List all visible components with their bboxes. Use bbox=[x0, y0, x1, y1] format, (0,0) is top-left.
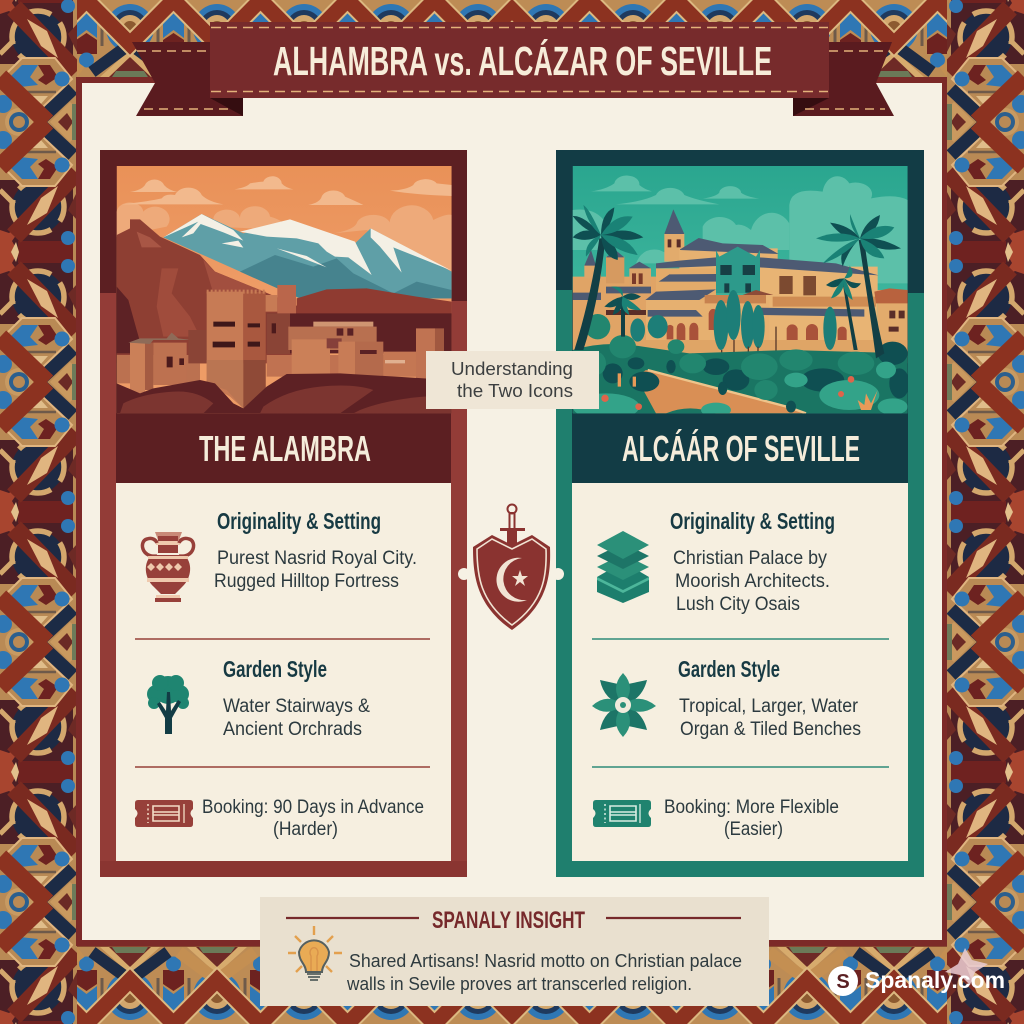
tag: understanding the two icons: the Two Icons bbox=[457, 380, 573, 401]
row text bbox=[214, 548, 417, 592]
header band bbox=[116, 414, 451, 483]
icon: vase bbox=[142, 532, 194, 602]
icon: ticket bbox=[593, 800, 651, 827]
panel heading: ALCÁÁR OF SEVILLE bbox=[622, 428, 860, 469]
panel body bbox=[572, 483, 908, 861]
row: garden style bbox=[147, 656, 370, 740]
tag: understanding the two icons bbox=[426, 351, 599, 409]
row text bbox=[223, 696, 370, 740]
callout heading: SPANALY INSIGHT bbox=[432, 907, 585, 934]
panel heading: THE ALAMBRA bbox=[199, 428, 371, 469]
row heading: Garden Style bbox=[223, 656, 327, 682]
row text: Christian Palace by bbox=[673, 548, 827, 569]
row heading: Originality & Setting bbox=[217, 508, 381, 534]
icon: stacked layers bbox=[597, 531, 649, 603]
icon: shield with sword, crescent and star bbox=[458, 504, 564, 630]
row text: Ancient Orchrads bbox=[223, 719, 362, 740]
row text: Tropical, Larger, Water bbox=[679, 696, 859, 717]
row text: Rugged Hilltop Fortress bbox=[214, 571, 399, 592]
row: garden style bbox=[592, 656, 861, 740]
callout text bbox=[346, 951, 742, 994]
row text bbox=[679, 696, 861, 740]
callout: Spanaly insight bbox=[260, 897, 769, 1006]
ribbon tails bbox=[132, 42, 894, 116]
title text: ALHAMBRA vs. ALCÁZAR OF SEVILLE bbox=[273, 38, 772, 84]
title ribbon banner bbox=[132, 22, 894, 116]
sword bbox=[500, 504, 525, 546]
panel: Alcazar of Seville bbox=[556, 150, 924, 877]
row text: Moorish Architects. bbox=[675, 571, 830, 592]
icon: tree bbox=[147, 675, 189, 734]
header band bbox=[572, 414, 908, 483]
row text bbox=[673, 548, 830, 615]
icon: ticket bbox=[135, 800, 193, 827]
ribbon body bbox=[210, 22, 829, 98]
cream framed page bbox=[76, 77, 947, 946]
tag: understanding the two icons: Understanding bbox=[451, 358, 573, 379]
row text: (Easier) bbox=[724, 819, 783, 840]
panel frame bbox=[556, 150, 924, 877]
shield bbox=[473, 535, 550, 630]
row: booking bbox=[593, 797, 839, 840]
row heading: Garden Style bbox=[678, 656, 780, 682]
callout text: walls in Sevile proves art transcerled religion. bbox=[346, 974, 692, 994]
row: originality and setting bbox=[142, 508, 417, 602]
row text: Purest Nasrid Royal City. bbox=[217, 548, 417, 569]
row: booking bbox=[135, 797, 424, 840]
row text: Water Stairways & bbox=[223, 696, 370, 717]
panel: The Alhambra bbox=[100, 150, 467, 877]
row text: Organ & Tiled Benches bbox=[680, 719, 861, 740]
row text: (Harder) bbox=[273, 819, 338, 840]
panel frame bbox=[100, 150, 467, 877]
connector knobs bbox=[458, 568, 564, 580]
crescent bbox=[496, 558, 527, 602]
row: originality and setting bbox=[597, 508, 835, 615]
watermark: Spanaly.com: S bbox=[836, 971, 850, 993]
row text: Lush City Osais bbox=[676, 594, 800, 615]
row text bbox=[202, 797, 424, 840]
illustration: Alcazar palace with palms and gardens bbox=[573, 166, 909, 420]
star bbox=[512, 570, 528, 586]
row heading: Originality & Setting bbox=[670, 508, 835, 534]
panel body bbox=[116, 483, 451, 861]
illustration: Alhambra fortress and snowy mountains bbox=[117, 166, 452, 413]
row text: Booking: 90 Days in Advance bbox=[202, 797, 424, 818]
row text: Booking: More Flexible bbox=[664, 797, 839, 818]
icon: flower bbox=[592, 673, 656, 737]
watermark: Spanaly.com bbox=[828, 948, 1005, 996]
callout text: Shared Artisans! Nasrid motto on Christian palace bbox=[349, 951, 742, 971]
icon: light bulb bbox=[288, 926, 342, 980]
watermark: Spanaly.com: Spanaly.com bbox=[865, 967, 1005, 993]
row text bbox=[664, 797, 839, 840]
